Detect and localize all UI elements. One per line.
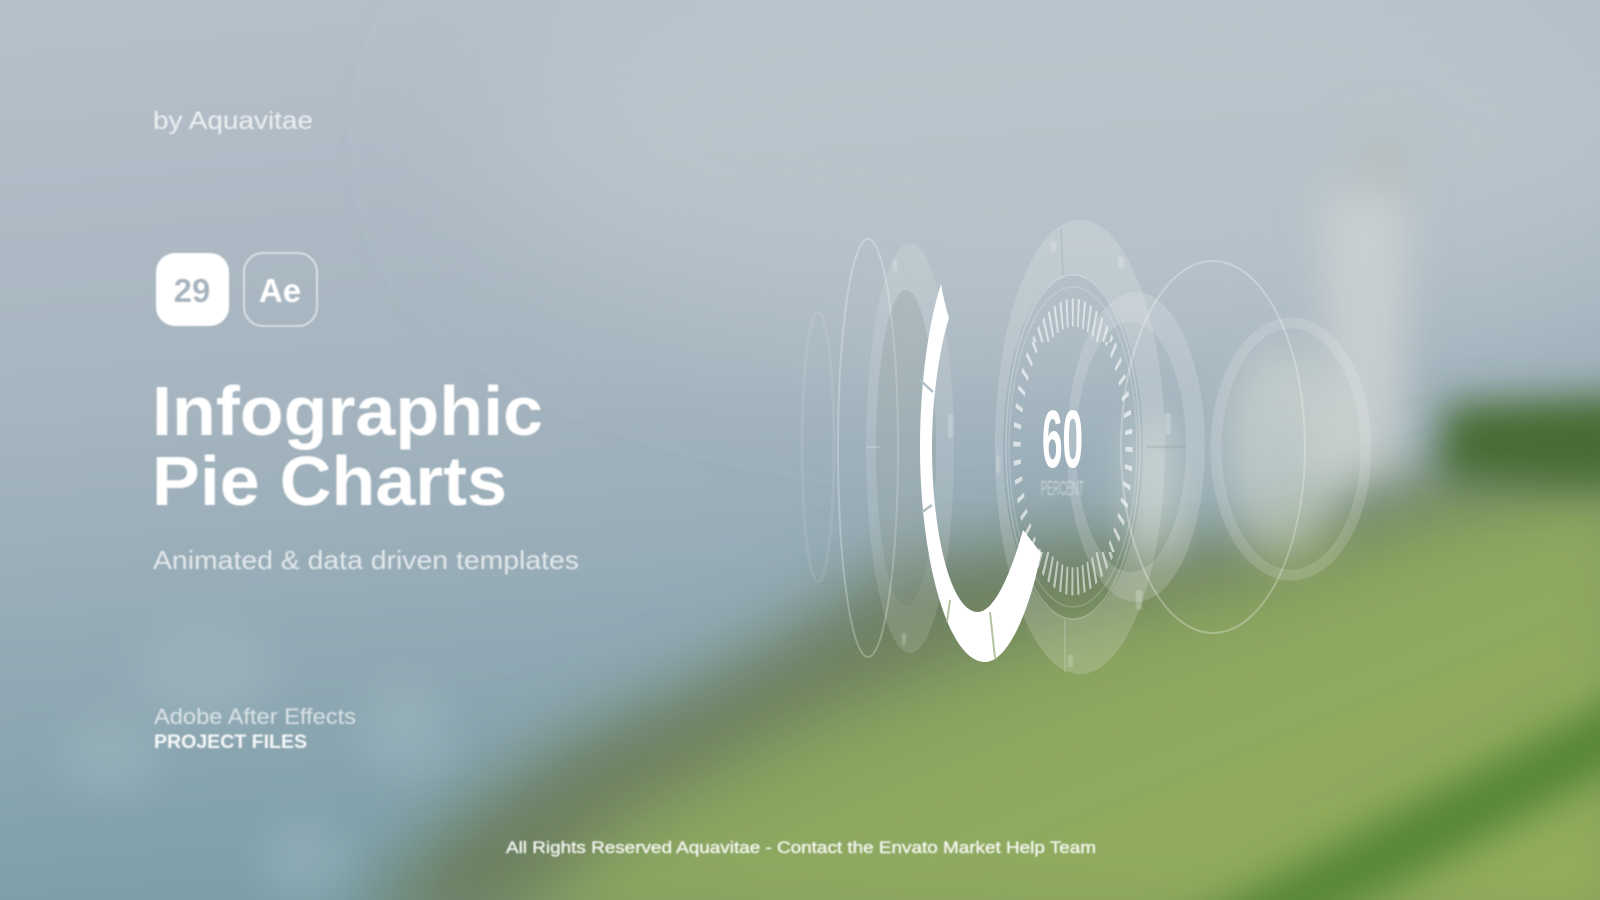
badge: 29 count: 29 — [174, 272, 210, 309]
infographic pie charts cluster: PERCENT — [1041, 478, 1084, 500]
title: Pie Charts — [152, 442, 507, 520]
infographic pie charts cluster: 60 — [1042, 394, 1083, 485]
white segmented arc — [920, 284, 1041, 662]
thick right ring — [1216, 323, 1366, 575]
badge: Ae: Ae — [259, 272, 301, 309]
project files label: PROJECT FILES — [154, 732, 307, 753]
faint disc labels — [893, 241, 1171, 667]
title: Infographic — [152, 372, 543, 450]
byline: by Aquavitae — [153, 107, 313, 135]
software label: Adobe After Effects — [154, 704, 356, 729]
tick gauge ring — [1017, 307, 1129, 587]
subtitle: Animated & data driven templates — [153, 545, 579, 575]
thin outline ring — [1121, 261, 1305, 633]
left thin ring — [838, 239, 898, 657]
left pale band disc — [866, 243, 954, 653]
title — [152, 372, 543, 520]
badge: 29 count — [156, 253, 229, 326]
central pale band disc — [893, 220, 1171, 674]
badge: Ae — [244, 253, 317, 326]
footer copyright: All Rights Reserved Aquavitae - Contact the Envato Market Help Team — [506, 838, 1096, 857]
infographic pie charts cluster — [802, 220, 1366, 674]
right overlapping band disc — [1067, 292, 1205, 602]
far left thin ring — [802, 312, 834, 582]
